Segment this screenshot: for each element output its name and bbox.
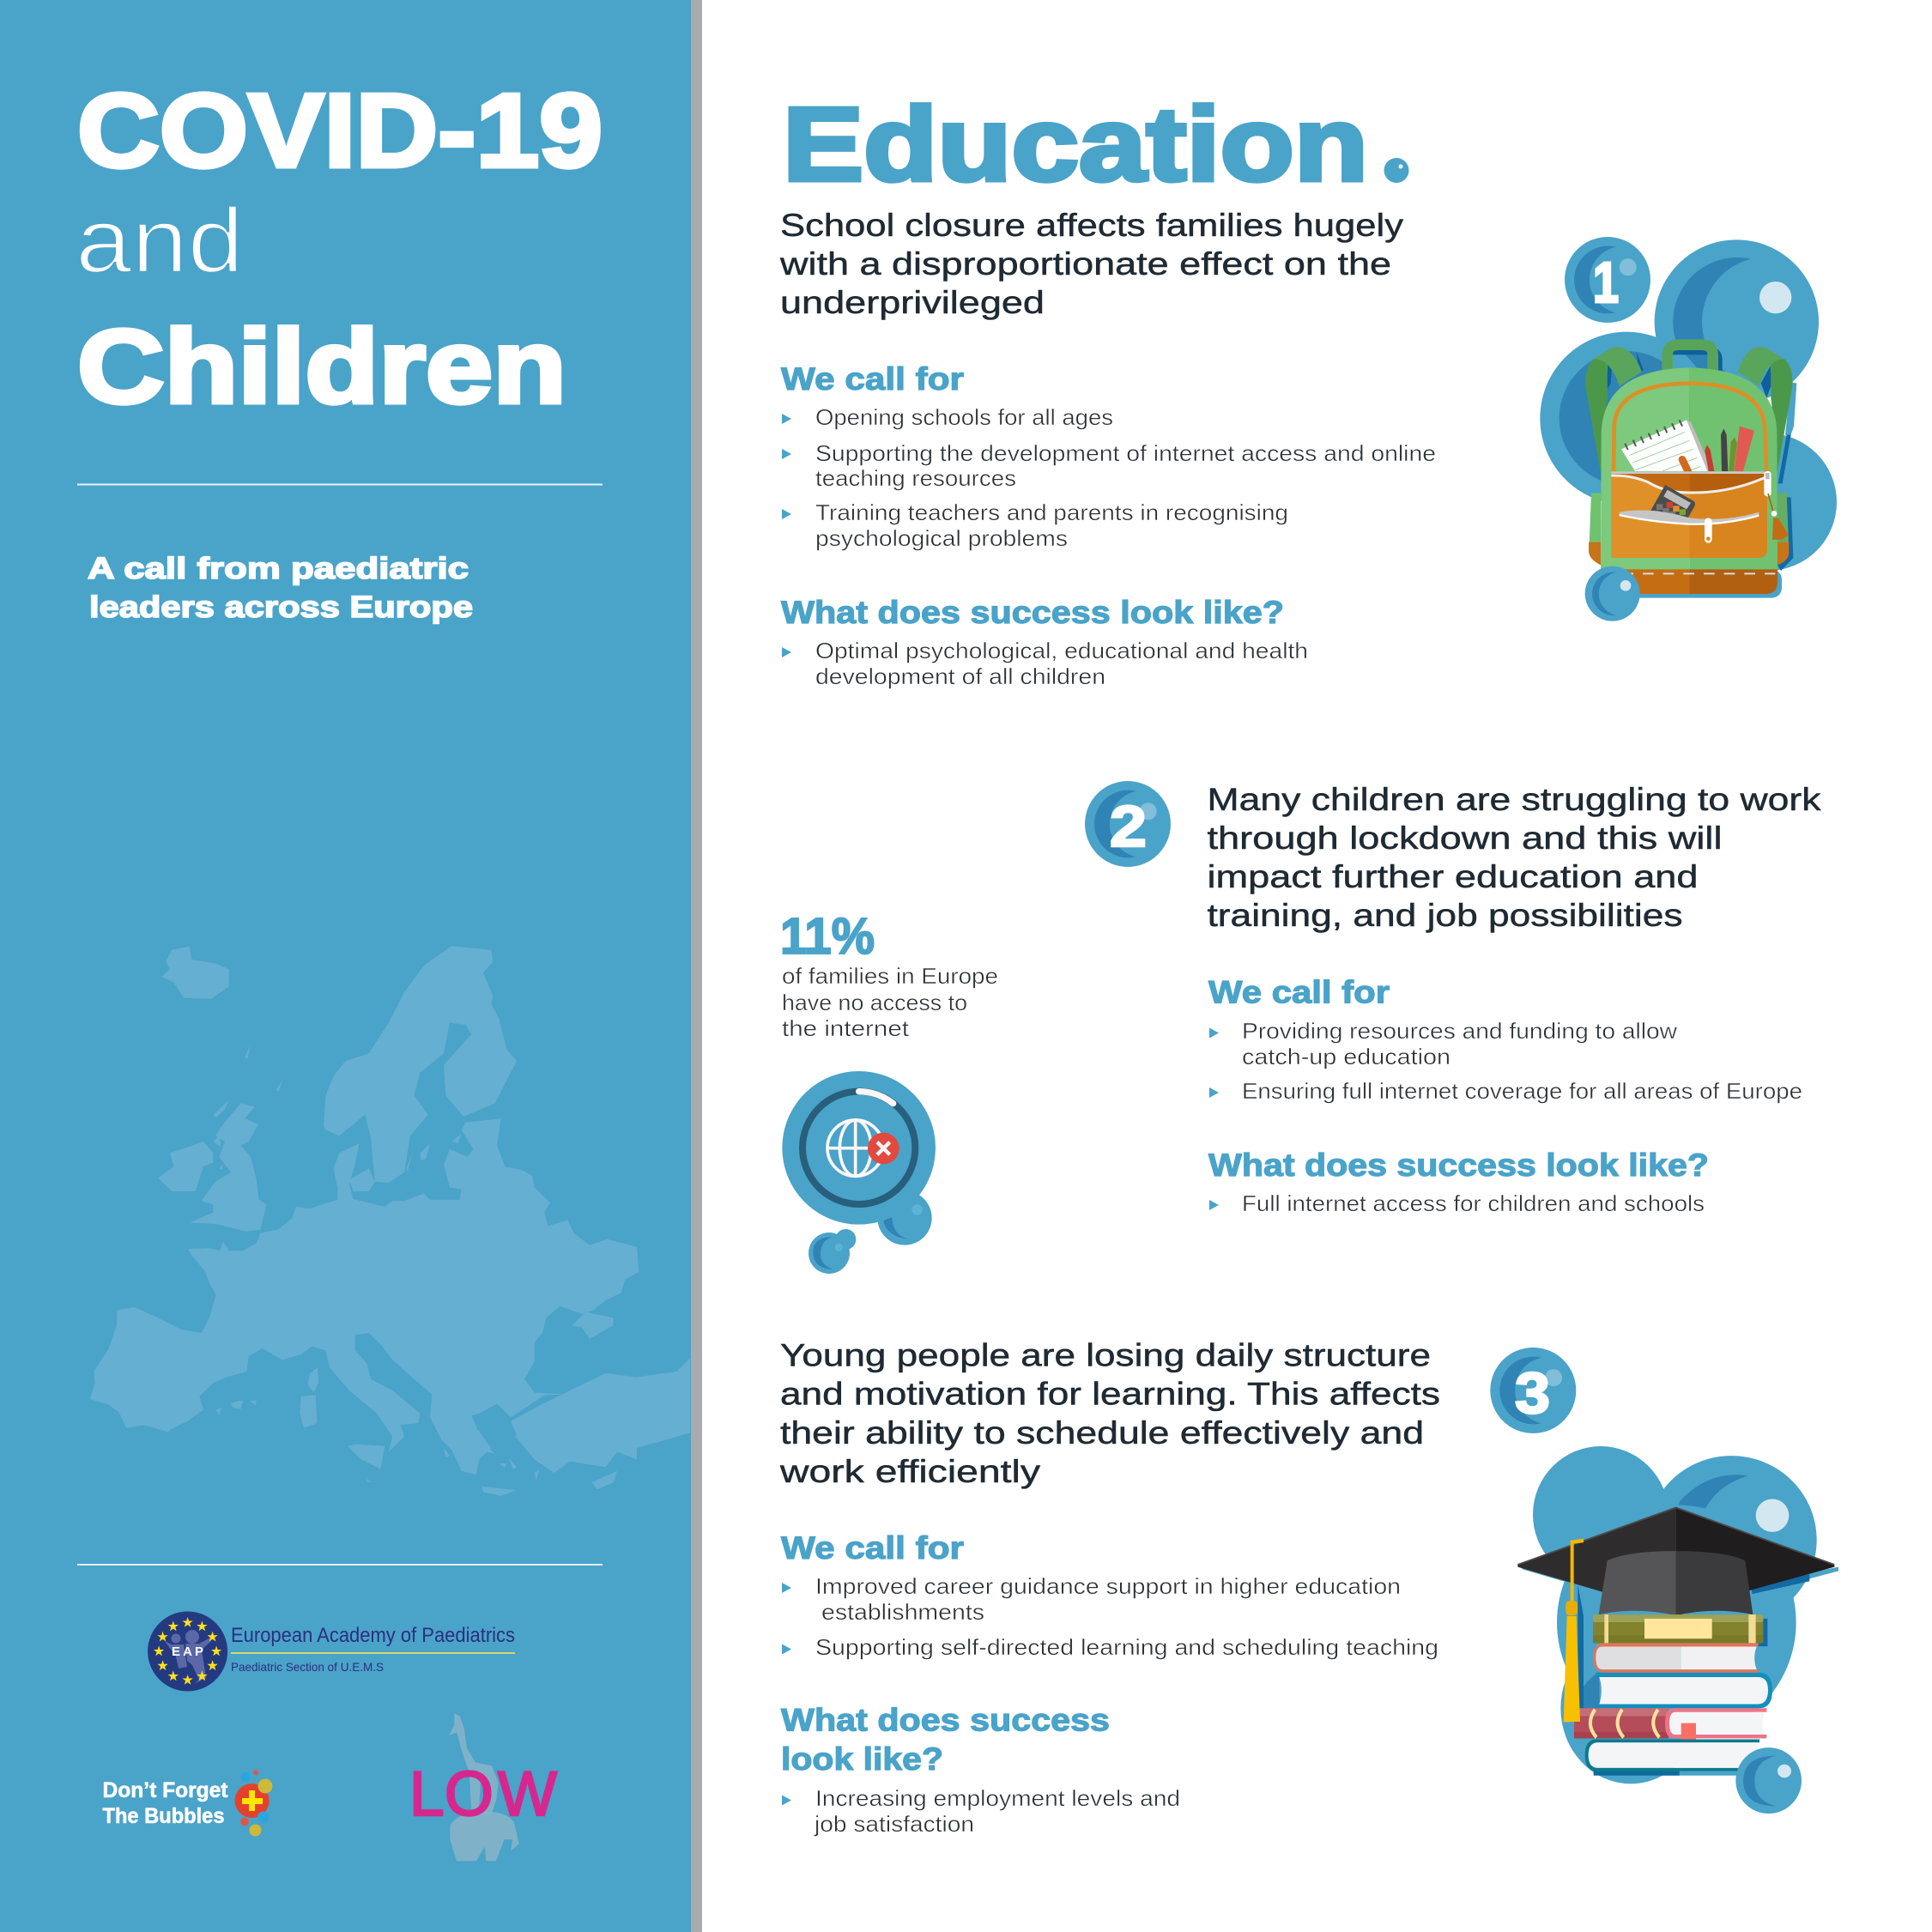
handle [1668,345,1713,371]
call list [782,404,1436,551]
logo: Don't Forget The Bubbles [103,1770,273,1837]
logo: European Academy of Paediatrics [148,1612,515,1691]
subtitle [88,552,473,624]
notebook [1621,420,1713,471]
badge 2: 2 [1110,794,1147,859]
title: COVID-19 [77,72,603,189]
call list [782,1573,1438,1660]
calculator [1646,485,1695,523]
heading: success: What does success look like? [1208,1148,1709,1183]
books [1574,1614,1772,1772]
call list: Opening schools for all ages [815,404,1113,430]
small bubble [1585,566,1640,621]
statistic: 11%: have no access to [782,990,967,1015]
subtitle: A call from paediatric [88,552,469,585]
call list: Providing resources and funding to allow [1242,1018,1677,1044]
tassel [1564,1541,1584,1723]
lead statement 2: impact further education and [1207,859,1698,894]
straps [1585,347,1642,472]
heading: we call for: We call for [1208,975,1390,1009]
subtitle: leaders across Europe [89,591,473,624]
success list [782,1785,1180,1837]
call list: Supporting self-directed learning and scheduling teaching [815,1634,1438,1660]
lead statement 2 [1207,782,1821,933]
heading: success: What does success look like? [781,595,1284,630]
statistic: 11%: 11% [780,908,875,965]
lead statement 1 [779,208,1404,320]
heading: success: look like? [781,1741,943,1777]
call list [1209,1018,1802,1104]
badge 2 [1085,781,1171,867]
heading: success [781,1703,1110,1777]
shadows [1785,382,1796,436]
title: and [76,189,244,292]
icon: graduation cap and books [1517,1446,1838,1814]
zipper arc [1614,384,1766,474]
title [76,72,603,425]
map of Europe [90,946,691,1496]
lead statement 2: training, and job possibilities [1207,898,1682,933]
call list: Supporting the development of internet access and online [815,440,1436,466]
logo: European Academy of Paediatrics: European Academy of Paediatrics [231,1624,515,1647]
lead statement 3 [779,1337,1440,1489]
success list: Increasing employment levels and [815,1785,1180,1811]
red book [1574,1708,1766,1745]
success list: Full internet access for children and schools [1242,1190,1705,1216]
call list: Training teachers and parents in recognising [815,500,1288,525]
orange book [1593,1643,1758,1673]
title: Children [77,308,566,425]
section 2 text [1207,782,1821,1216]
lead statement 2: through lockdown and this will [1207,821,1722,856]
call list: psychological problems [815,525,1068,551]
bubbles behind [1533,1446,1817,1784]
badge 3: 3 [1515,1360,1550,1426]
lead statement 2: Many children are struggling to work [1207,782,1821,817]
lead statement 3: Young people are losing daily structure [780,1337,1431,1373]
logo: Don't Forget The Bubbles: The Bubbles [103,1804,225,1828]
badge 1 [1565,237,1650,323]
panel: left blue sidebar [0,0,702,1932]
logo: Don't Forget The Bubbles: Don’t Forget [103,1778,228,1802]
pencils and ruler [1705,427,1754,471]
heading: we call for: We call for [781,361,964,397]
lead statement 3: and motivation for learning. This affects [780,1377,1440,1411]
bubbles behind the backpack [1540,239,1837,598]
success list: development of all children [815,663,1105,689]
lead statement 3: work efficiently [779,1454,1041,1489]
blue book [1596,1673,1772,1708]
logo: European Academy of Paediatrics: EAP [172,1644,203,1659]
call list: catch-up education [1242,1044,1451,1069]
success list: job satisfaction [814,1811,974,1837]
lead statement 1: underprivileged [780,285,1045,320]
zip pulls and tassel [1705,471,1789,543]
cap board [1517,1507,1676,1616]
icon: globe with no access [782,1071,936,1274]
lead statement 1: with a disproportionate effect on the [779,246,1391,282]
lower zipper [1620,510,1759,524]
call list: Improved career guidance support in higher education [815,1573,1401,1599]
heading: we call for: We call for [781,1530,964,1566]
heading: success: What does success [781,1703,1110,1737]
call list: Ensuring full internet coverage for all areas of Europe [1242,1078,1802,1104]
statistic: 11%: the internet [782,1015,910,1041]
logo: LOW: LOW [409,1759,557,1829]
badge 1: 1 [1593,251,1619,315]
section 1 text [779,208,1436,689]
statistic: 11%: of families in Europe [782,963,998,989]
side pockets [1590,493,1601,543]
lead statement 3: their ability to schedule effectively and [780,1415,1424,1451]
badge 3 [1490,1348,1576,1433]
success list: Optimal psychological, educational and health [815,638,1308,663]
statistic: 11% [780,908,998,1041]
small bubble [1735,1747,1802,1814]
lead statement 1: School closure affects families hugely [780,208,1404,243]
call list: teaching resources [815,465,1016,491]
icon: backpack with bubbles [1540,239,1837,621]
heading: Education: Education [783,86,1368,203]
success list [782,638,1308,689]
olive book [1593,1614,1763,1643]
bottom panel [1601,568,1689,594]
cap skull [1599,1551,1676,1615]
cap shadow [1522,1566,1838,1594]
section 3 text [779,1337,1440,1837]
logo: LOW [409,1713,557,1861]
logo: European Academy of Paediatrics: Paediatric Section of U.E.M.S [231,1660,384,1674]
orange pocket [1611,472,1689,558]
body [1601,367,1689,569]
teal book [1585,1740,1759,1772]
call list: establishments [821,1599,984,1625]
